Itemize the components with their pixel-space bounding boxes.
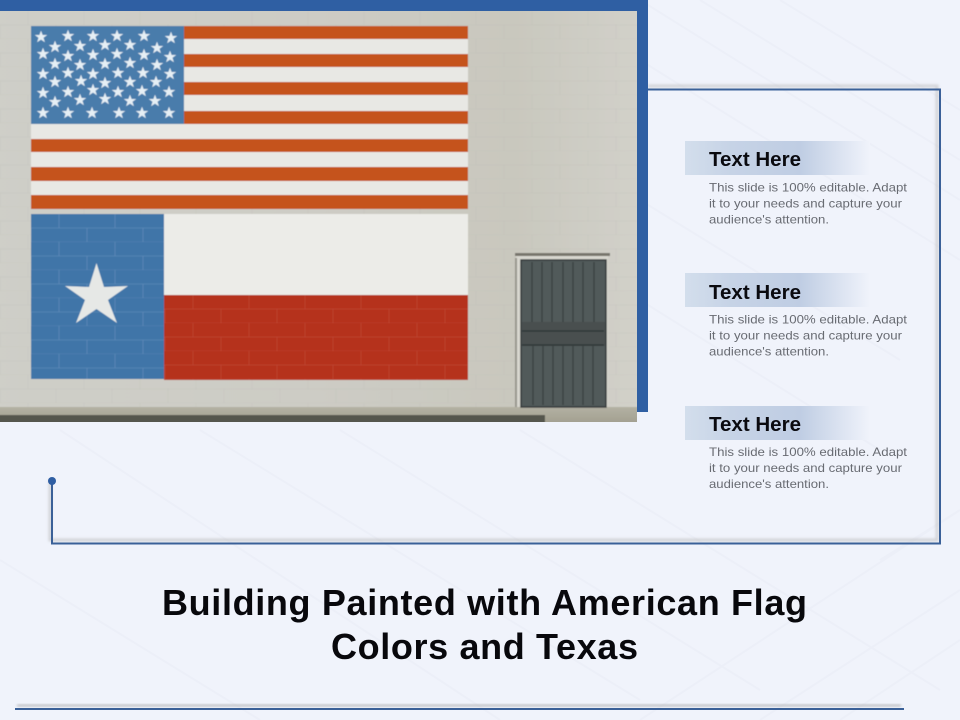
texas flag (31, 214, 468, 380)
title: Building Painted with American Flag (162, 582, 807, 623)
connector dot (48, 477, 56, 485)
text block 2: Text Here (709, 282, 801, 304)
text block 3 (685, 406, 908, 491)
wall (0, 5, 644, 430)
text block 2: it to your needs and capture your (709, 328, 902, 342)
american flag (31, 26, 468, 209)
text block 1: This slide is 100% editable. Adapt (709, 180, 908, 194)
texas star (65, 263, 128, 323)
text block 2: audience's attention. (709, 344, 829, 358)
ground (0, 406, 637, 422)
text block 2 (685, 273, 908, 358)
text block 3: audience's attention. (709, 477, 829, 491)
title (162, 582, 807, 667)
text block 1: it to your needs and capture your (709, 196, 902, 210)
text block 3: it to your needs and capture your (709, 461, 902, 475)
text block 2: This slide is 100% editable. Adapt (709, 312, 908, 326)
door (515, 253, 610, 407)
photo: building wall with painted flags (0, 0, 648, 430)
panel outline: bordered frame with connector dot (48, 86, 940, 544)
text block 3: This slide is 100% editable. Adapt (709, 445, 908, 459)
blue photo backing (0, 0, 648, 412)
footer rule (15, 704, 904, 710)
text block 1: Text Here (709, 149, 801, 171)
canton (31, 26, 184, 124)
text block 1: audience's attention. (709, 212, 829, 226)
text block 3: Text Here (709, 414, 801, 436)
text block 1 (685, 141, 908, 226)
title: Colors and Texas (331, 626, 638, 667)
stars (35, 30, 177, 118)
